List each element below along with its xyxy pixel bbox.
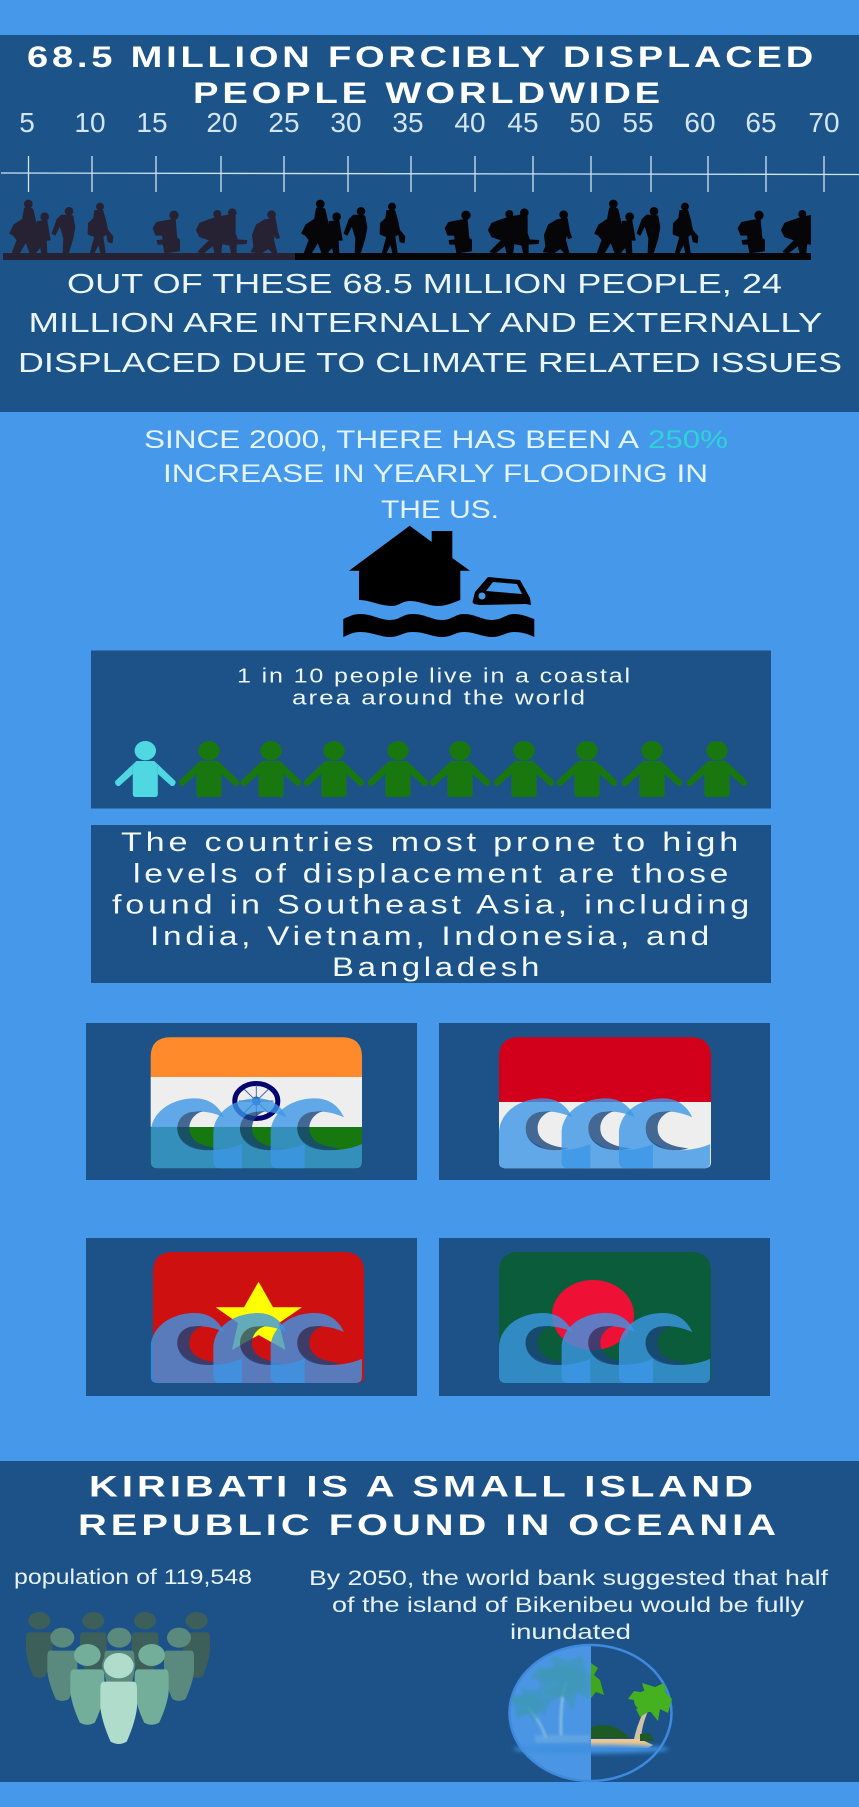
Kiribati heading: [78, 1471, 780, 1542]
island sand: [591, 1739, 653, 1748]
scale numbers: [19, 107, 840, 138]
panel: most affected countries text: India, Vietnam, Indonesia, and: [150, 921, 713, 951]
icon: flooded house and car: [343, 526, 534, 637]
scale numbers: 55: [622, 107, 654, 138]
scale numbers: 40: [454, 107, 486, 138]
flooding statistic text: SINCE 2000, THERE HAS BEEN A: [144, 426, 639, 454]
panel: most affected countries text: Bangladesh: [332, 952, 543, 982]
pictogram: walking refugees, black groups: [295, 200, 859, 260]
inundation text: [309, 1567, 828, 1644]
water line: [513, 1744, 669, 1754]
Kiribati heading: KIRIBATI IS A SMALL ISLAND: [89, 1471, 757, 1504]
scale numbers: 70: [808, 107, 840, 138]
inundation text: inundated: [510, 1621, 631, 1644]
scale numbers: 35: [392, 107, 424, 138]
scale numbers: 50: [569, 107, 601, 138]
palm tree: [634, 1704, 651, 1739]
inundation text: of the island of Bikenibeu would be fully: [332, 1594, 805, 1617]
icon: half-submerged island globe: [507, 1645, 672, 1781]
ghost palms under water: [507, 1655, 594, 1743]
population text: population of 119,548: [14, 1566, 252, 1589]
climate displacement text: MILLION ARE INTERNALLY AND EXTERNALLY: [28, 307, 823, 338]
scale numbers: 10: [74, 107, 106, 138]
pictogram: nine green people: [179, 741, 747, 797]
scale numbers: 15: [136, 107, 168, 138]
panel: Vietnam flag with waves: [86, 1238, 417, 1396]
Indonesia flag: [499, 1037, 711, 1168]
icon: crowd of people: [26, 1612, 210, 1744]
Vietnam flag: [153, 1252, 364, 1383]
scale axis with ticks: [1, 156, 859, 192]
icon: waves: [499, 1313, 710, 1383]
coastal population text: 1 in 10 people live in a coastal: [237, 666, 632, 688]
flooding statistic text: [144, 426, 728, 524]
climate displacement text: OUT OF THESE 68.5 MILLION PEOPLE, 24: [67, 268, 782, 299]
icon: waves: [499, 1098, 710, 1168]
flooding statistic text: THE US.: [381, 496, 499, 524]
green palm edge: [591, 1663, 604, 1698]
panel: most affected countries text: [91, 825, 771, 983]
title: [27, 41, 817, 110]
scale numbers: 65: [745, 107, 777, 138]
scale numbers: 60: [684, 107, 716, 138]
panel: most affected countries text: found in Southeast Asia, including: [112, 890, 753, 920]
icon: waves: [151, 1313, 362, 1383]
coastal population text: area around the world: [292, 688, 587, 710]
scale numbers: 20: [206, 107, 238, 138]
scale numbers: 45: [507, 107, 539, 138]
India flag: [151, 1037, 362, 1168]
panel: India flag with waves: [86, 1023, 417, 1180]
panel: displaced people header: [0, 35, 859, 412]
panel: coastal population: [91, 650, 771, 808]
panel: most affected countries text: The countries most prone to high: [121, 827, 742, 857]
shrubs: [591, 1725, 630, 1738]
flooding statistic text: INCREASE IN YEARLY FLOODING IN: [163, 460, 708, 488]
title: 68.5 MILLION FORCIBLY DISPLACED: [27, 41, 817, 74]
panel: Kiribati: [0, 1461, 859, 1782]
icon: waves: [151, 1098, 362, 1168]
Kiribati heading: REPUBLIC FOUND IN OCEANIA: [78, 1509, 780, 1542]
inundation text: By 2050, the world bank suggested that half: [309, 1567, 828, 1590]
panel: most affected countries text: levels of displacement are those: [133, 858, 732, 888]
coastal population text: [237, 666, 632, 710]
panel: Bangladesh flag with waves: [439, 1238, 770, 1396]
scale numbers: 25: [268, 107, 300, 138]
pictogram: walking refugees, faded group: [3, 200, 295, 260]
flooding statistic text: 250%: [648, 426, 728, 454]
scale numbers: 30: [330, 107, 362, 138]
Bangladesh flag: [499, 1252, 711, 1383]
pictogram: one cyan person of ten: [115, 741, 176, 797]
panel: Indonesia flag with waves: [439, 1023, 770, 1180]
climate displacement text: DISPLACED DUE TO CLIMATE RELATED ISSUES: [18, 347, 842, 378]
title: PEOPLE WORLDWIDE: [193, 77, 664, 110]
climate displacement text: [18, 268, 842, 378]
scale numbers: 5: [19, 107, 35, 138]
